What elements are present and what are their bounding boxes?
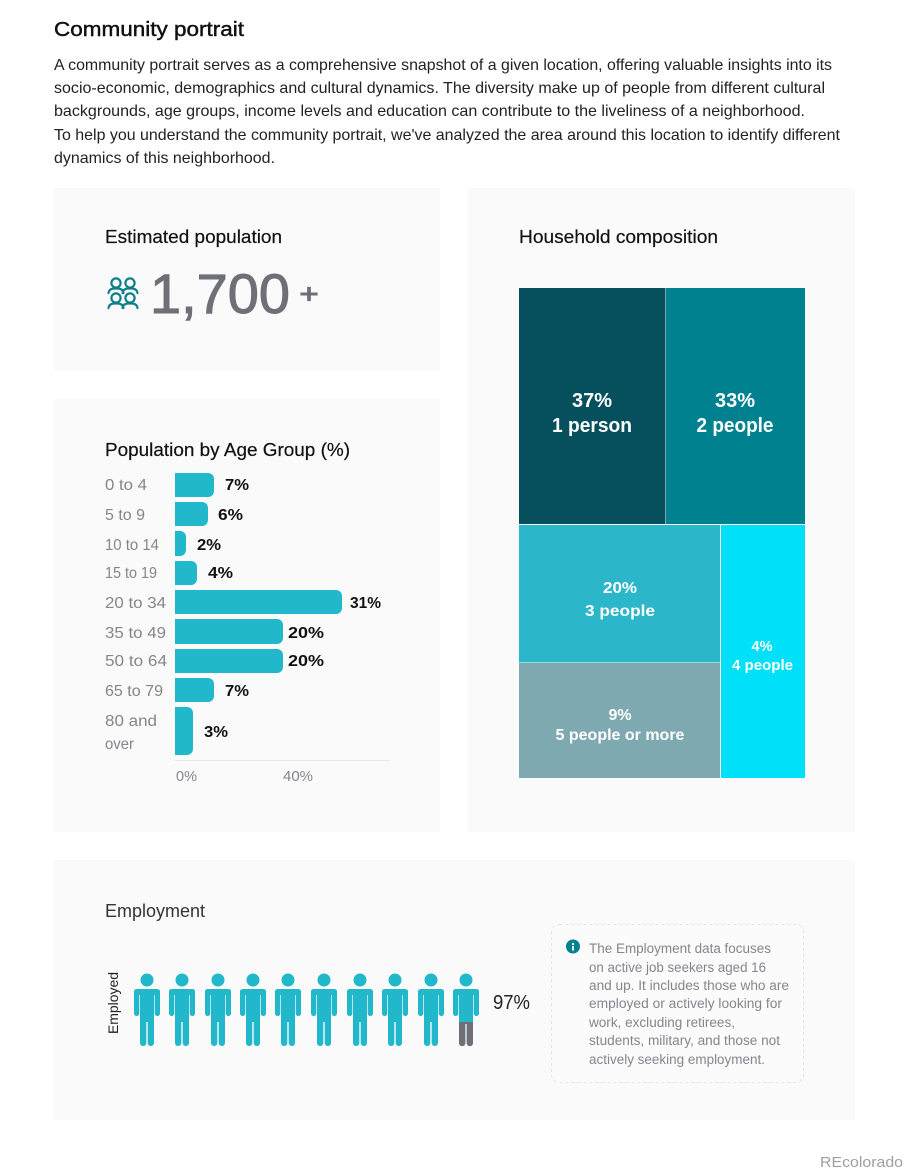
axis label: employed: Employed <box>105 972 121 1034</box>
title: Community portrait <box>54 18 244 41</box>
intro text: backgrounds, age groups, income levels and education can contribute to the liveliness of a neighborhood. <box>54 103 805 120</box>
bar chart: 2% <box>197 537 221 554</box>
intro text: To help you understand the community portrait, we've analyzed the area around this location to identify different <box>54 127 841 144</box>
heading: population by age group: Population by Age Group (%) <box>105 440 350 460</box>
treemap chart <box>519 288 805 778</box>
tile: 1 person: 1 person <box>552 415 632 437</box>
bar chart: 31% <box>350 595 381 612</box>
bar chart: 7% <box>225 477 249 494</box>
note text: employed or actively looking for <box>589 996 783 1011</box>
bar chart: 80 and <box>105 713 157 730</box>
bar chart <box>105 473 390 785</box>
tile: 4 people: 4 people <box>732 658 793 674</box>
bar chart: 0 to 4 <box>105 477 147 494</box>
note text: on active job seekers aged 16 <box>589 960 766 975</box>
bar chart: over <box>105 736 134 753</box>
tile: 4 people: 4% <box>752 639 773 655</box>
bar chart: 20% <box>288 625 324 642</box>
plus sign: + <box>299 278 319 309</box>
tile: 1 person <box>519 288 666 524</box>
bar chart: 65 to 79 <box>105 683 163 700</box>
tile: 5 people or more: 9% <box>608 707 632 724</box>
note text: students, military, and those not <box>589 1033 780 1048</box>
bar chart: 40% <box>283 768 313 785</box>
bar chart: 0% <box>176 768 197 785</box>
note text: The Employment data focuses <box>589 941 771 956</box>
bar chart: 7% <box>225 683 249 700</box>
heading: estimated population: Estimated population <box>105 227 282 247</box>
tile: 5 people or more: 5 people or more <box>556 727 685 744</box>
tile: 3 people: 20% <box>603 580 637 597</box>
tile: 5 people or more <box>519 663 720 778</box>
bar chart: 10 to 14 <box>105 537 159 554</box>
panel: employment <box>54 860 855 1120</box>
source credit: REcolorado <box>820 1155 903 1171</box>
note text: actively seeking employment. <box>589 1052 765 1067</box>
tile: 2 people: 33% <box>715 390 755 412</box>
intro text <box>54 57 841 167</box>
bar chart: 4% <box>208 565 233 582</box>
note text <box>588 941 789 1067</box>
tile: 3 people: 3 people <box>585 603 655 620</box>
bar chart: 15 to 19 <box>105 565 157 582</box>
population number: 1,700 <box>150 262 290 325</box>
heading: household composition: Household composition <box>519 227 718 247</box>
tile: 1 person: 37% <box>572 390 612 412</box>
bar chart: 20 to 34 <box>105 595 166 612</box>
bar chart: 50 to 64 <box>105 653 167 670</box>
heading: employment: Employment <box>105 901 205 921</box>
callout: employment note <box>552 924 804 1082</box>
tile: 3 people <box>519 525 720 662</box>
icon: people group <box>108 278 138 308</box>
panel: estimated population <box>54 188 440 371</box>
tile: 2 people <box>666 288 805 524</box>
panel: household composition <box>468 188 855 832</box>
note text: and up. It includes those who are <box>589 978 789 993</box>
intro text: A community portrait serves as a comprehensive snapshot of a given location, offering valuable insights into its <box>54 57 832 74</box>
bar chart: 20% <box>288 653 324 670</box>
bar chart: 3% <box>204 724 228 741</box>
employment percentage: 97% <box>493 992 530 1014</box>
bar chart: 6% <box>218 507 243 524</box>
pictogram: employed people <box>134 974 479 1046</box>
tile: 2 people: 2 people <box>696 415 774 437</box>
intro text: socio-economic, demographics and cultural dynamics. The diversity make up of people from different cultural <box>54 80 825 97</box>
tile: 4 people <box>721 525 805 778</box>
icon: info <box>566 940 580 954</box>
bar chart: 35 to 49 <box>105 625 166 642</box>
panel: population by age group <box>54 399 440 832</box>
bar chart: 5 to 9 <box>105 507 145 524</box>
intro text: dynamics of this neighborhood. <box>54 150 275 167</box>
note text: work, excluding retirees, <box>588 1015 735 1030</box>
